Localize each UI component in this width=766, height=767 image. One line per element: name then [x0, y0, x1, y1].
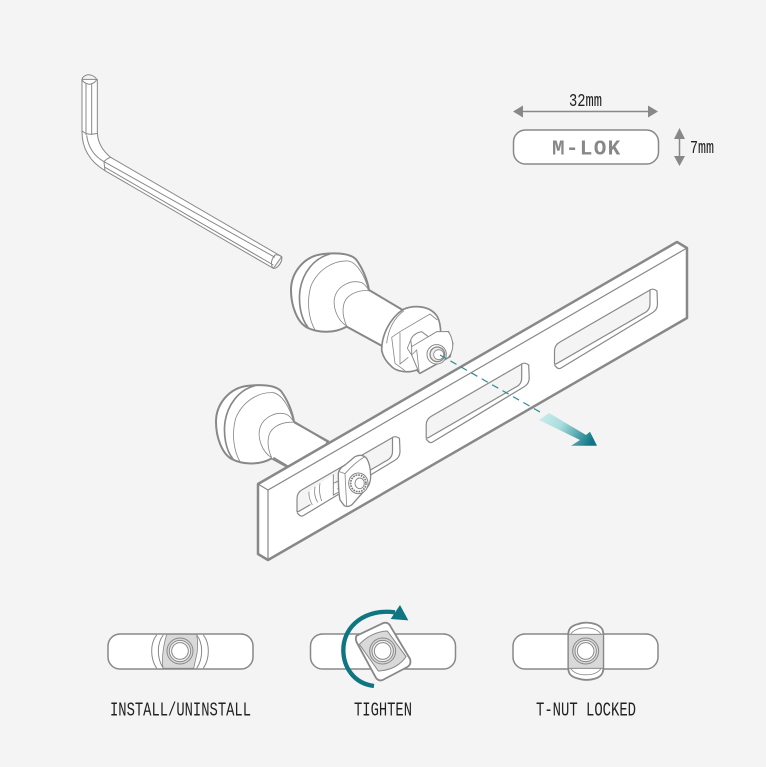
dimension: 32mm width	[513, 92, 658, 118]
step: install / uninstall	[108, 634, 253, 722]
icon: rotation arrow	[343, 605, 408, 686]
dimension: 32mm width: 32mm	[569, 92, 602, 112]
hex key	[82, 75, 282, 268]
step: tighten	[310, 605, 456, 722]
step: install / uninstall: INSTALL/UNINSTALL	[110, 700, 251, 722]
upper mount with T-nut	[291, 253, 453, 373]
step: tighten: TIGHTEN	[354, 700, 412, 722]
slot: right	[554, 289, 658, 369]
rotated T-nut	[356, 623, 410, 680]
dashed alignment line	[440, 355, 540, 412]
dimension: 7mm height	[674, 128, 714, 166]
M-LOK slot label	[514, 130, 658, 164]
M-LOK slot label: M-LOK	[552, 138, 622, 162]
dimension: 7mm height: 7mm	[690, 139, 714, 159]
slot: left	[297, 437, 400, 516]
slot: middle	[426, 363, 529, 443]
T-nut installed in rail slot	[308, 455, 371, 506]
direction arrow	[539, 413, 597, 446]
lower mount behind rail	[216, 385, 332, 478]
step: T-nut locked	[513, 623, 658, 722]
M-LOK rail plate	[258, 242, 687, 560]
step: T-nut locked: T-NUT LOCKED	[536, 700, 636, 722]
